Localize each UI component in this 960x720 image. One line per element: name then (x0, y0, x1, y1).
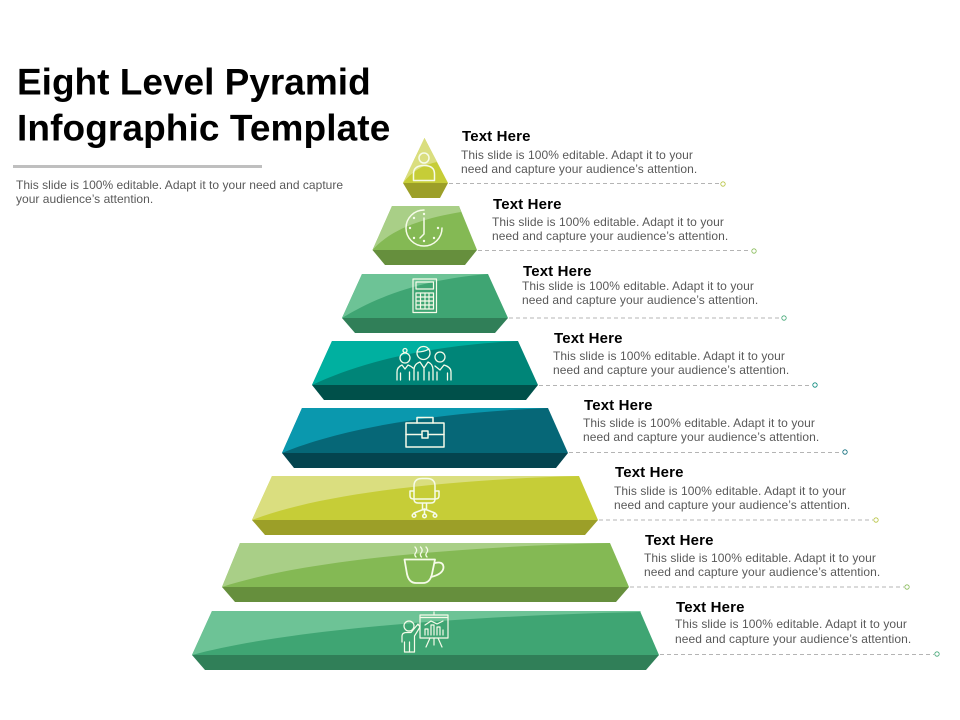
level 6 connector (599, 518, 878, 522)
level 3 pyramid tier (342, 274, 508, 333)
level 1 text: Text Here (462, 128, 531, 145)
level 1 text (461, 128, 697, 176)
icon: team of people (397, 346, 451, 380)
title: Eight Level Pyramid (17, 62, 371, 102)
level 6 text (614, 464, 850, 512)
subtitle text: This slide is 100% editable. Adapt it to your need and capture (16, 178, 343, 192)
level 2 text: Text Here (493, 196, 562, 213)
level 8 text: need and capture your audience’s attention. (675, 632, 911, 646)
icon: calculator (413, 279, 436, 312)
level 3 connector (509, 316, 786, 320)
level 2 connector (478, 249, 756, 253)
level 8 text: Text Here (676, 599, 745, 616)
level 7 text (644, 532, 880, 579)
icon: coffee cup (404, 547, 444, 583)
level 5 pyramid tier (282, 408, 568, 468)
level 5 text: This slide is 100% editable. Adapt it to your (583, 416, 815, 430)
level 6 text: This slide is 100% editable. Adapt it to your (614, 484, 846, 498)
level 7 pyramid tier (222, 543, 629, 602)
subtitle text: your audience’s attention. (16, 192, 153, 206)
level 2 text (492, 196, 728, 243)
level 8 text: This slide is 100% editable. Adapt it to your (675, 617, 907, 631)
level 4 connector (539, 383, 817, 387)
level 2 text: This slide is 100% editable. Adapt it to your (492, 215, 724, 229)
level 5 text (583, 397, 819, 444)
level 1 text: need and capture your audience’s attention. (461, 162, 697, 176)
level 7 text: need and capture your audience’s attention. (644, 565, 880, 579)
subtitle text (16, 178, 343, 206)
level 3 text: Text Here (523, 263, 592, 280)
level 8 pyramid tier (192, 611, 659, 670)
level 8 text (675, 599, 911, 646)
level 2 text: need and capture your audience’s attention. (492, 229, 728, 243)
title rule (13, 165, 262, 168)
icon: clock (406, 210, 442, 246)
level 2 pyramid tier (372, 206, 477, 265)
level 5 text: Text Here (584, 397, 653, 414)
level 5 text: need and capture your audience’s attention. (583, 430, 819, 444)
icon: briefcase (406, 418, 444, 447)
icon: person (414, 153, 434, 180)
level 4 text: This slide is 100% editable. Adapt it to your (553, 349, 785, 363)
level 1 pyramid tier (403, 138, 448, 198)
level 4 text: Text Here (554, 330, 623, 347)
level 5 connector (569, 450, 847, 454)
level 4 text: need and capture your audience’s attention. (553, 363, 789, 377)
level 6 pyramid tier (252, 476, 598, 535)
icon: office chair (410, 478, 439, 518)
level 4 pyramid tier (312, 341, 538, 400)
title (17, 62, 390, 148)
level 1 connector (449, 182, 725, 186)
level 3 text: This slide is 100% editable. Adapt it to your (522, 279, 754, 293)
level 8 connector (660, 652, 939, 656)
level 3 text: need and capture your audience’s attention. (522, 293, 758, 307)
level 6 text: need and capture your audience’s attention. (614, 498, 850, 512)
title: Infographic Template (17, 108, 390, 148)
level 6 text: Text Here (615, 464, 684, 481)
level 7 text: This slide is 100% editable. Adapt it to your (644, 551, 876, 565)
level 7 connector (630, 585, 909, 589)
level 7 text: Text Here (645, 532, 714, 549)
level 3 text (522, 263, 758, 307)
icon: presenter with chart board (402, 612, 448, 652)
level 4 text (553, 330, 789, 377)
level 1 text: This slide is 100% editable. Adapt it to your (461, 148, 693, 162)
